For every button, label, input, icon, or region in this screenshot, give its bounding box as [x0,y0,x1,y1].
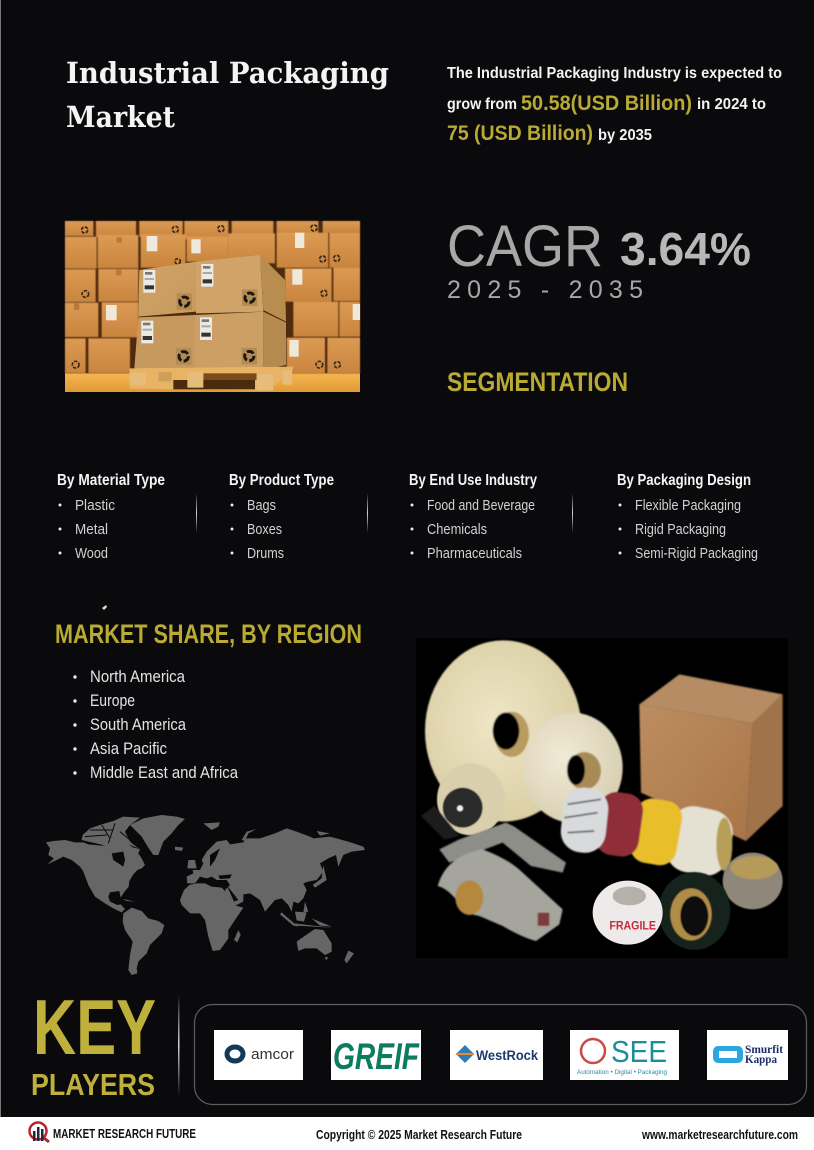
segment column: packaging design: Rigid Packaging [635,521,726,538]
logo: WestRock: WestRock [476,1048,538,1063]
row of coloured tape rolls [559,786,737,880]
market summary text: grow from [447,96,517,113]
tan tape roll [723,853,783,909]
logo: GREIF [331,1030,421,1080]
fragile tape roll: FRAGILE [609,918,656,932]
logo: SEE: Automation • Digital • Packaging [577,1069,667,1076]
black tape roll [658,872,730,950]
CAGR value [447,214,751,279]
market summary text: by 2035 [598,127,652,144]
segment column: packaging design: Semi-Rigid Packaging [635,545,758,562]
segment column: product type: Drums [247,545,284,562]
title second line: Market [66,100,176,134]
key players heading [31,983,156,1102]
segment column: product type: By Product Type [229,472,334,489]
segment column: packaging design [617,472,758,562]
cardboard box [639,674,783,841]
logo: Smurfit Kappa [707,1030,788,1080]
market summary text: in 2024 to [697,96,766,113]
segment column: product type: Boxes [247,521,282,538]
logo: SEE: SEE [611,1034,667,1069]
region list: South America [90,715,186,734]
world map [46,815,365,975]
key players heading: PLAYERS [31,1067,155,1102]
footer brand: MARKET RESEARCH FUTURE [53,1127,196,1141]
segment column: product type: Bags [247,497,276,514]
market share heading: MARKET SHARE, BY REGION [55,619,362,649]
footer copyright: Copyright © 2025 Market Research Future [316,1128,522,1142]
segment column: material type: By Material Type [57,472,165,489]
medium tape roll [523,713,623,823]
key players heading: KEY [33,983,156,1071]
logo: amcor: amcor [251,1046,294,1063]
region list: Asia Pacific [90,739,167,758]
market summary text: 75 (USD Billion) [447,121,593,145]
footer logo [30,1122,49,1142]
logo: SEE [570,1030,679,1080]
left edge strip [0,0,1,1117]
region list: North America [90,667,185,686]
logo: amcor [214,1030,303,1080]
title: Industrial Packaging [66,56,389,90]
segmentation heading: SEGMENTATION [447,367,628,397]
market summary text [447,65,782,145]
CAGR value: CAGR [447,214,603,279]
segment column: material type: Metal [75,521,108,538]
key players panel [194,1004,806,1104]
segment column: material type [57,472,165,562]
segment column: end use industry [409,472,537,562]
logo: GREIF: GREIF [333,1036,420,1077]
photo: stacked cardboard boxes on pallet [65,221,360,392]
tape on dispenser [437,763,505,835]
market summary text: 50.58(USD Billion) [521,91,692,115]
region list [73,667,238,782]
fragile tape roll [593,881,663,945]
CAGR value: 3.64% [620,223,751,275]
segment column: packaging design: By Packaging Design [617,472,751,489]
CAGR period: 2025 - 2035 [447,276,643,304]
large tape roll [425,640,582,822]
tape dispenser [421,806,566,941]
market summary text: The Industrial Packaging Industry is expected to [447,65,782,82]
logo: WestRock [450,1030,543,1080]
logo: Smurfit Kappa: Kappa [745,1054,777,1066]
footer [0,1117,814,1150]
logo: Smurfit Kappa: Smurfit [745,1044,783,1056]
segment column: end use industry: By End Use Industry [409,472,537,489]
segment column: material type: Plastic [75,497,115,514]
segment column: product type [229,472,334,562]
region list: Europe [90,691,135,710]
segment column: material type: Wood [75,545,108,562]
segment column: end use industry: Food and Beverage [427,497,535,514]
segment column: end use industry: Pharmaceuticals [427,545,522,562]
region list: Middle East and Africa [90,763,238,782]
photo: packaging tapes and box [416,638,788,958]
segment column: end use industry: Chemicals [427,521,487,538]
segment column: packaging design: Flexible Packaging [635,497,741,514]
